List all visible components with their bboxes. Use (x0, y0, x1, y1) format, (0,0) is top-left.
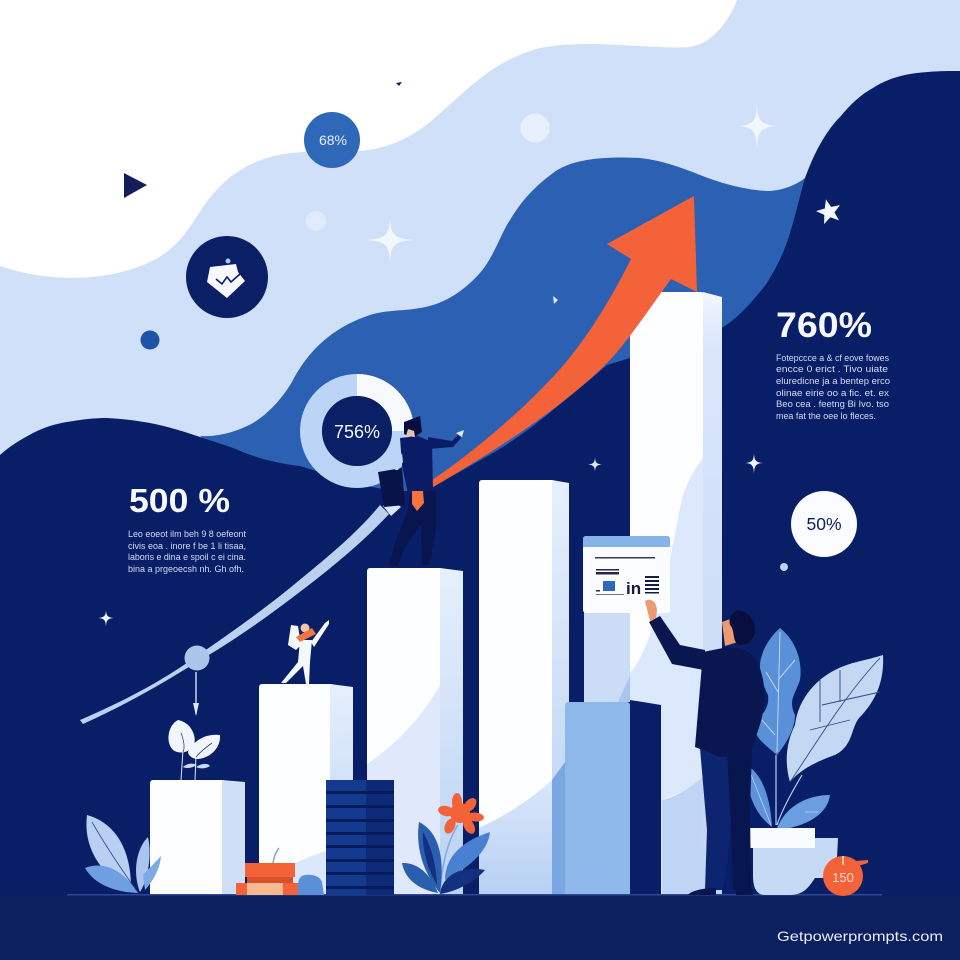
stat body text right: eluredicne ja a bentep erco (776, 376, 890, 386)
stat: 760%: 760% (776, 306, 872, 345)
bar 3 (367, 568, 463, 899)
orange badge (823, 856, 868, 896)
star (816, 199, 840, 224)
window card (583, 536, 670, 613)
red books (236, 848, 300, 895)
flower plant (402, 793, 490, 894)
badge: percent circle: 68% (319, 132, 347, 148)
bar 2 (259, 684, 353, 899)
small dark mark (396, 82, 402, 86)
sparkle small (588, 457, 602, 472)
stat body text: Leo eoeot ilm beh 9 8 oefeont (128, 529, 246, 539)
donut chart: 756% (334, 422, 380, 442)
background: medium blue wave (200, 158, 880, 520)
blue dot (140, 330, 160, 350)
bar 1 (150, 780, 245, 899)
stat body text right: encce 0 erict . Tivo uiate (776, 364, 888, 374)
background: light blue wave (0, 0, 960, 520)
decorative triangle (124, 173, 147, 198)
stat: 500% (128, 482, 246, 574)
businessman (645, 600, 765, 895)
back panel beside tall bar (584, 612, 630, 702)
badge: percent circle (304, 112, 360, 168)
stat body text right: Fotepccce a & cf eove fowes (776, 353, 889, 363)
right plant (747, 628, 883, 828)
plant pot (750, 828, 838, 895)
small blue shape (298, 875, 324, 895)
baseline (67, 894, 882, 896)
stat: 500%: 500 % (129, 482, 230, 519)
stat body text right: olinae eirie oo a fic. et. ex (776, 388, 890, 398)
badge: 50% circle (791, 491, 857, 557)
coin stack (326, 780, 394, 895)
small dot (780, 563, 788, 571)
floor strip (0, 895, 960, 960)
watermark: Getpowerprompts.com (777, 928, 943, 944)
donut chart (311, 385, 403, 477)
main climber figure (378, 416, 464, 566)
stat body text: laboris e dina e spoil c ei cina. (128, 552, 246, 562)
sparkle right (745, 453, 763, 474)
sparkle: centre (365, 216, 415, 265)
plant bottom left (85, 815, 161, 893)
trend line (80, 500, 401, 724)
red growth arrow (432, 196, 697, 487)
icon: dark circle with chart shield (186, 236, 268, 318)
bar 5 tall (630, 292, 722, 899)
sparkle left (98, 610, 114, 627)
sparkle: top right (738, 102, 778, 152)
plant on bar 1 (168, 720, 220, 780)
stat body text right: Beo cea . feetng Bi Ivo. tso (776, 399, 889, 409)
pale circle top (520, 114, 550, 142)
badge: 50% circle: 50% (806, 514, 842, 534)
flower head (437, 793, 484, 836)
window card: in (626, 579, 641, 598)
stat body text right: mea fat the oee lo fleces. (776, 411, 876, 421)
front block (565, 700, 661, 899)
bar 4 (479, 480, 569, 899)
tiny star (553, 296, 558, 304)
stat body text (128, 529, 246, 574)
stat body text: bina a prgeoecsh nh. Gh ofh. (128, 564, 244, 574)
pale circle middle (306, 211, 326, 231)
orange badge: 150 (832, 870, 854, 885)
stat: 760% (776, 306, 890, 421)
small climber figure on bar 2 (281, 620, 329, 684)
stat body text: civis eoa . inore f be 1 li tisaa, (128, 541, 246, 551)
stat body text right (776, 353, 890, 421)
